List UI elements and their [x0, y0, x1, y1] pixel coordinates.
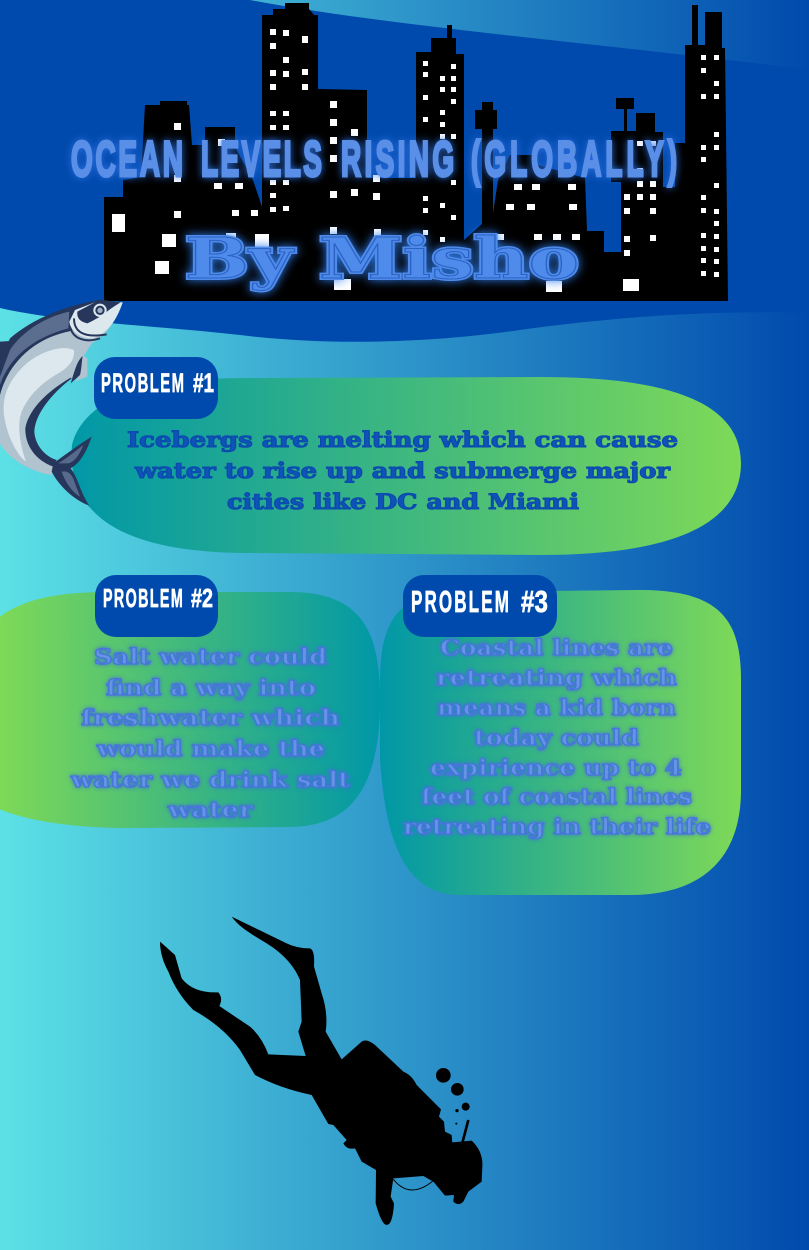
title: LEVELS: [201, 130, 322, 187]
label: problem 2: PROBLEM: [103, 585, 183, 613]
author byline: By Misho: [185, 226, 579, 292]
text: problem 3 body: [403, 635, 711, 839]
label: problem 3: [403, 575, 557, 637]
label: problem 1: PROBLEM: [101, 367, 184, 398]
title: OCEAN: [71, 130, 183, 187]
top dark wave: [0, 0, 809, 342]
blob: problem 1 background: [72, 377, 741, 555]
blob: problem 2 background: [0, 592, 380, 828]
panel: problem 3: [380, 590, 741, 895]
text: problem 2 body: Salt water could: [94, 644, 327, 669]
label: problem 2: [95, 575, 218, 637]
label: problem 3: PROBLEM: [411, 585, 509, 619]
text: problem 2 body: water we drink salt: [70, 767, 350, 792]
text: problem 1 body: water to rise up and submerge major: [134, 458, 671, 483]
panel: problem 1: [72, 377, 741, 555]
text: problem 2 body: find a way into: [106, 675, 316, 700]
text: problem 3 body: retreating which: [436, 665, 677, 690]
author byline: By Misho: [185, 226, 579, 292]
city skyline: [104, 3, 728, 301]
label: problem 3: #3: [521, 584, 548, 619]
title: (GLOBALLY): [471, 130, 677, 187]
label: problem 2: #2: [191, 583, 213, 613]
icon: scuba diver silhouette: [160, 917, 482, 1225]
small windows: [174, 29, 719, 277]
text: problem 2 body: water: [167, 797, 254, 822]
text: problem 2 body: would make the: [96, 736, 325, 761]
text: problem 2 body: freshwater which: [81, 705, 340, 730]
title: RISING: [341, 130, 454, 187]
text: problem 3 body: expirience up to 4: [430, 755, 682, 780]
icon: leaping fish: [0, 300, 123, 506]
blob: problem 3 background: [380, 590, 741, 895]
large windows: [112, 214, 639, 292]
text: problem 2 body: [70, 644, 350, 822]
text: problem 1 body: Icebergs are melting which can cause: [127, 427, 678, 452]
text: problem 3 body: retreating in their life: [403, 814, 711, 839]
text: problem 3 body: today could: [474, 725, 639, 750]
label: problem 1: #1: [193, 368, 214, 398]
title: [71, 130, 677, 187]
label: problem 1: [94, 357, 218, 419]
text: problem 3 body: means a kid born: [437, 695, 676, 720]
text: problem 1 body: [127, 427, 678, 514]
text: problem 1 body: cities like DC and Miami: [227, 489, 579, 514]
text: problem 3 body: Coastal lines are: [440, 635, 673, 660]
panel: problem 2: [0, 592, 380, 828]
text: problem 3 body: feet of coastal lines: [421, 784, 692, 809]
